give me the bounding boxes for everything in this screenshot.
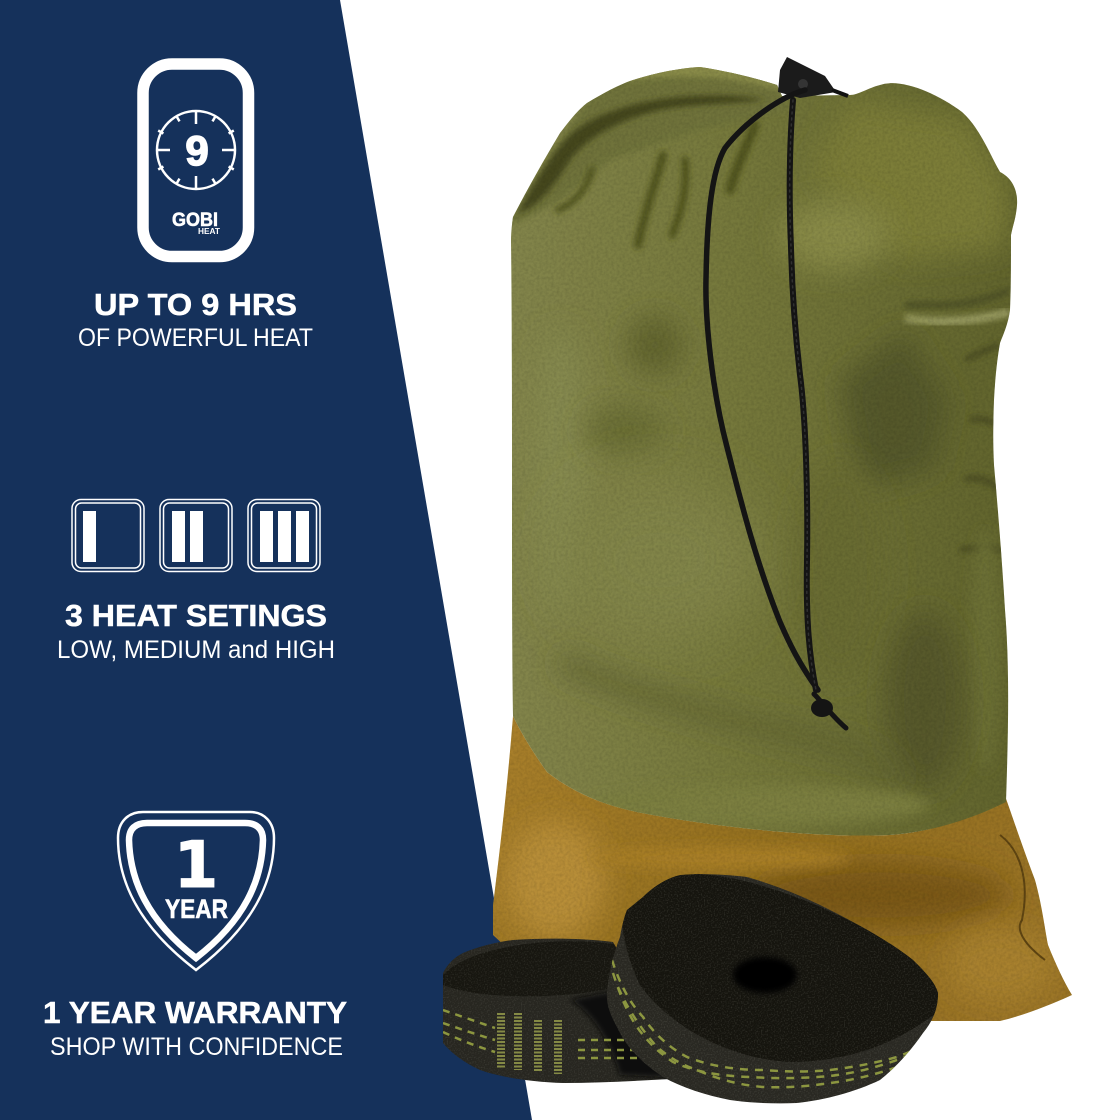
panel: navy background [0,0,532,1120]
heading: up to 9 hrs: UP TO 9 HRS [94,287,297,322]
text: low, medium and high: LOW, MEDIUM and HIGH [57,636,335,664]
text: of powerful heat: OF POWERFUL HEAT [78,324,313,352]
heading: 3 heat setings: 3 HEAT SETINGS [65,598,327,633]
icon: heat pack with nine hour clock: 9 [185,127,209,174]
green bag body [500,60,1030,850]
drawstring cords [706,90,846,728]
icon: high setting [248,500,320,572]
feature: one year warranty [43,812,347,1061]
right strap coil [600,870,945,1110]
product: coiled tree straps [440,870,945,1110]
tan bag base [480,710,1090,1030]
feature: nine hours of heat [78,64,313,352]
icon: heat pack with nine hour clock [143,64,248,256]
icon: heat pack with nine hour clock: GOBI [172,210,218,231]
heading: 1 year warranty: 1 YEAR WARRANTY [43,995,347,1030]
icon: warranty shield [118,812,274,970]
feature: three heat settings [57,500,335,664]
icon: medium setting [160,500,232,572]
drawstring cord lock [778,57,848,98]
icon: warranty shield: YEAR [165,894,228,924]
text: shop with confidence: SHOP WITH CONFIDENCE [50,1033,343,1061]
left strap coil [443,938,668,1083]
icon: low setting [72,500,144,572]
icon: heat pack with nine hour clock: HEAT [198,227,220,236]
icon: warranty shield: 1 [174,829,218,903]
product: drawstring stuff sack [480,57,1090,1030]
